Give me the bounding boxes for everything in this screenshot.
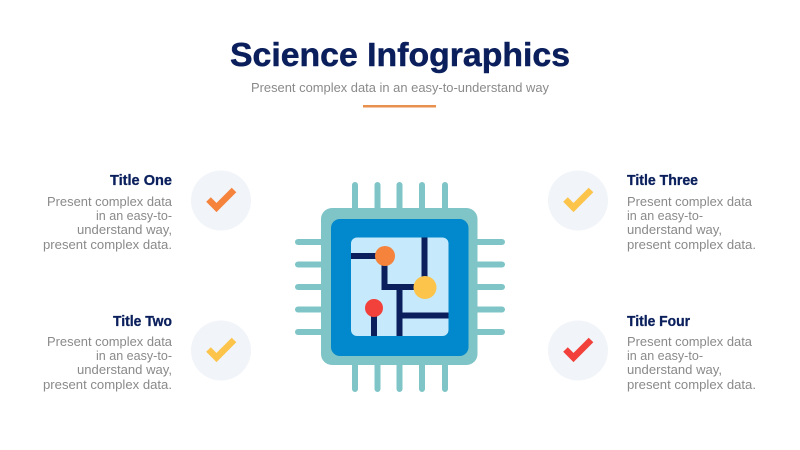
icon: microchip: [298, 185, 502, 389]
heading: title two: Title Two: [113, 314, 172, 330]
heading: title three: Title Three: [627, 173, 698, 189]
icon: orange check: [191, 170, 251, 230]
text block: title four: Present complex data: [627, 335, 752, 349]
heading: title four: Title Four: [627, 314, 690, 330]
chip screen: [351, 238, 448, 336]
text block: title two: present complex data.: [43, 378, 172, 392]
title underline: [363, 105, 436, 108]
text block: title three: present complex data.: [627, 238, 756, 252]
subtitle: Present complex data in an easy-to-understand way: [251, 81, 550, 95]
icon: red check: [548, 320, 608, 380]
heading: title one: Title One: [110, 173, 172, 189]
text block: title two: understand way,: [77, 363, 172, 377]
text block: title four: understand way,: [627, 363, 722, 377]
red node: [365, 299, 383, 317]
chip core: [331, 219, 468, 356]
panel: title one: [43, 170, 251, 252]
panel: title two: [43, 314, 251, 392]
text block: title three: understand way,: [627, 223, 722, 237]
text block: title three: in an easy-to-: [627, 209, 703, 223]
yellow node: [414, 276, 436, 299]
text block: title three: Present complex data: [627, 195, 752, 209]
text block: title one: in an easy-to-: [96, 209, 172, 223]
text block: title two: Present complex data: [47, 335, 172, 349]
circuit traces: [351, 238, 448, 336]
orange node: [375, 246, 395, 266]
chip pins: [298, 185, 502, 389]
text block: title four: present complex data.: [627, 378, 756, 392]
text block: title two: in an easy-to-: [96, 349, 172, 363]
icon: yellow check: [191, 320, 251, 380]
text block: title four: in an easy-to-: [627, 349, 703, 363]
title: Science Infographics: [230, 37, 570, 74]
panel: title four: [548, 314, 756, 392]
text block: title one: understand way,: [77, 223, 172, 237]
text block: title one: Present complex data: [47, 195, 172, 209]
chip body: [321, 208, 478, 365]
icon: yellow check: [548, 170, 608, 230]
panel: title three: [548, 170, 756, 252]
text block: title one: present complex data.: [43, 238, 172, 252]
